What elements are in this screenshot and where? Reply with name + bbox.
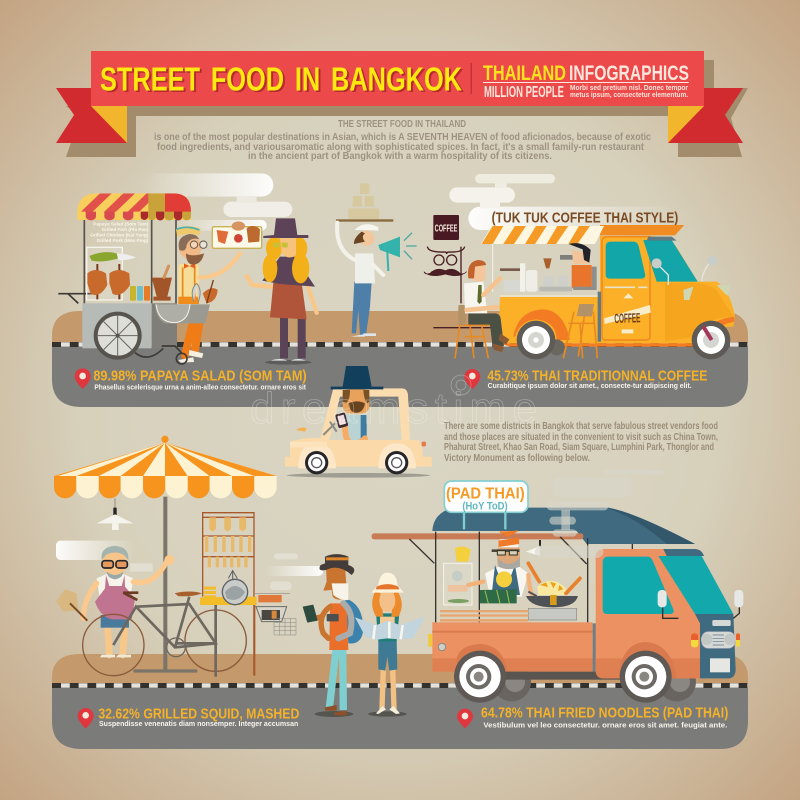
- driver hat: [331, 366, 383, 389]
- cart body: [82, 303, 152, 348]
- right ribbon tail: [668, 88, 743, 143]
- cook shirt and apron: [485, 566, 528, 597]
- tuk tuk trim: [500, 293, 600, 299]
- customer torso: [464, 282, 487, 313]
- truck body: [428, 549, 743, 701]
- waitress head: [359, 231, 374, 246]
- car body: [285, 427, 432, 468]
- side mirrors: [657, 261, 712, 285]
- caption: thai coffee: [464, 369, 707, 390]
- scene: car with driver: [285, 366, 432, 478]
- intro text block: in the ancient part of Bangkok with a warm hospitality of its citizens.: [248, 151, 552, 162]
- banner small text: metus ipsum, consectetur elementum.: [570, 92, 688, 99]
- tuk tuk roof: [600, 225, 684, 235]
- shop umbrella: [54, 436, 277, 673]
- rear wheels: [492, 663, 531, 701]
- truck lights: [691, 633, 698, 647]
- cook herbs: [496, 571, 512, 587]
- million people: MILLION PEOPLE: [484, 84, 564, 101]
- vendor fan: [56, 589, 78, 612]
- hanging scale: [222, 579, 248, 605]
- road panel: top: [52, 311, 748, 407]
- waitress with megaphone: [336, 183, 400, 337]
- cart menu: Grilled Pork (Moo Ping): [97, 238, 149, 243]
- cart awning: [77, 193, 191, 220]
- caption: papaya salad: [75, 368, 307, 391]
- caption: papaya salad: Phasellus scelerisque urna a anim-alleo consectetur. ornare eros sit: [94, 382, 306, 391]
- car shadow: [287, 473, 430, 478]
- cook arm: [199, 253, 240, 277]
- umbrella scallops: [54, 476, 254, 498]
- tourist arm and phone: [315, 607, 330, 638]
- driver arm and phone: [345, 427, 365, 443]
- vendor apron: [95, 575, 135, 619]
- customer legs: [468, 319, 498, 347]
- intro text block: THE STREET FOOD IN THAILAND: [338, 119, 466, 130]
- barista: [560, 243, 597, 290]
- megaphone sound lines: [404, 233, 417, 259]
- caption: grilled squid: Suspendisse venenatis diam nonsemper. Integer accumsan: [99, 719, 299, 728]
- chairs: [455, 305, 490, 358]
- umbrella pole: [163, 497, 167, 671]
- bicycle wheels: [83, 614, 144, 676]
- female shorts: [378, 641, 397, 671]
- front wheel: [135, 346, 187, 364]
- banner small text: [570, 85, 688, 99]
- waitress top: [355, 253, 375, 283]
- drying squid rack: [203, 513, 254, 675]
- coffee signboard: COFFEE: [435, 223, 458, 234]
- steam pot: [528, 608, 577, 620]
- districts text block: Victory Monument as following below.: [444, 453, 590, 464]
- districts text block: and those places are situated in the convenient to visit such as China Town,: [444, 432, 718, 443]
- male tourist: [303, 554, 363, 717]
- scene: tuk tuk coffee: [404, 174, 735, 390]
- awning: [481, 226, 604, 292]
- wok with fried noodles: [526, 563, 580, 607]
- vendor shirt: [97, 574, 133, 600]
- title ribbon: [56, 51, 748, 157]
- caption: fried noodles: Vestibulum vel leo consectetur. ornare eros sit amet. feugiat ante.: [483, 720, 727, 729]
- bicycle saddle: [175, 592, 202, 596]
- umbrella canopy: [54, 443, 277, 476]
- woman face: [280, 238, 296, 257]
- tourist backpack: [345, 598, 363, 643]
- smoke: [449, 174, 675, 230]
- caption: fried noodles: [457, 705, 729, 729]
- caption: thai coffee: Curabitique ipsum dolor sit amet., consecte-tur adipiscing elit.: [488, 381, 692, 390]
- tourist hat: [319, 554, 354, 575]
- female shadow: [368, 711, 407, 717]
- vendor head: [102, 546, 127, 577]
- tourist camera: [327, 614, 339, 621]
- scene: papaya salad cart and people: [58, 173, 400, 391]
- truck wheels: [454, 651, 672, 703]
- cart poles: [84, 220, 176, 303]
- districts text block: There are some districts in Bangkok that serve fabulous street vendors food: [444, 421, 718, 432]
- tuk tuk title: (TUK TUK COFFEE THAI STYLE): [492, 210, 678, 226]
- cart menu: Papaya Salad (Som Tam): [93, 221, 149, 226]
- tourist shadow: [315, 711, 353, 717]
- food tray: [212, 221, 262, 248]
- woman hair: [263, 237, 309, 283]
- cart menu: Grilled Chicken (Kai Yang): [90, 232, 149, 237]
- intro text block: food ingredients, and variousaromatic along with sophisticated spices. In fact, it's a small family-run restaurant: [157, 142, 645, 153]
- mortar and pestle: [152, 266, 172, 301]
- female tourist: [355, 573, 425, 717]
- ribbon folds: [91, 106, 704, 143]
- seated customer: [455, 260, 597, 358]
- car wheels: [305, 451, 408, 474]
- pad thai sign: [444, 481, 528, 529]
- squid stall table: [200, 570, 257, 676]
- female hair: [372, 590, 402, 617]
- thailand heading: THAILAND: [483, 62, 566, 85]
- woman arms: [247, 276, 317, 313]
- title ribbon: STREET FOOD IN BANGKOK: [100, 62, 462, 98]
- cook head: [179, 236, 201, 259]
- tuk tuk door: [602, 237, 650, 340]
- pad thai sign: (PAD THAI): [446, 485, 525, 502]
- pad thai sign: (HoY ToD): [462, 501, 508, 513]
- city map: [355, 617, 425, 640]
- vendor legs: [107, 623, 125, 655]
- cart menu: Grilled Fish (Pla Pao): [101, 227, 149, 232]
- cook: [176, 226, 240, 363]
- female legs: [382, 668, 394, 708]
- caption: papaya salad: 89.98% PAPAYA SALAD (SOM TAM): [93, 369, 307, 385]
- cook legs: [185, 320, 200, 355]
- caption: grilled squid: 32.62% GRILLED SQUID, MASHED: [98, 707, 299, 723]
- food cart: [58, 190, 240, 364]
- tourist shirt: [329, 603, 348, 650]
- scene: grilled squid stall: [54, 436, 425, 729]
- truck mirrors: [663, 605, 739, 618]
- districts text block: Phahurat Street, Khao San Road, Siam Square, Lumphini Park, Thonglor and: [444, 442, 714, 453]
- cart wheel: [96, 314, 140, 358]
- truck windshield: [658, 556, 733, 614]
- female top: [376, 613, 399, 641]
- caption: grilled squid: [78, 707, 299, 729]
- car cabin frame: [320, 388, 410, 440]
- tourist head: [323, 566, 347, 600]
- left ribbon tail: [56, 88, 127, 143]
- woman legs: [284, 317, 302, 358]
- cook: [468, 531, 535, 603]
- intro text block: is one of the most popular destinations in Asian, which is A SEVENTH HEAVEN of food aficionados, because of exotic: [154, 132, 651, 143]
- road panel: bottom: [52, 654, 748, 749]
- door coffee badge: [604, 305, 651, 324]
- intro text block: [154, 119, 651, 162]
- cart menu: [90, 221, 149, 243]
- sauce bottles: [130, 286, 150, 301]
- truck side window: [603, 557, 674, 614]
- ribbon band: [91, 51, 704, 106]
- driver: [331, 366, 383, 445]
- truck canopy: [432, 508, 695, 544]
- woman with hat: [247, 218, 317, 365]
- tuk tuk wheels: [517, 321, 730, 359]
- hanging lamp: [526, 540, 540, 556]
- customer head: [472, 263, 486, 282]
- truck bed: [432, 622, 593, 672]
- coffee signboard: [424, 215, 497, 328]
- umbrella finial: [161, 436, 169, 443]
- truck cab: [596, 549, 702, 678]
- charcoal grill: [255, 593, 296, 635]
- scene: pad thai truck: [372, 470, 743, 729]
- wooden shelf: [440, 610, 528, 622]
- vendor arms: [83, 562, 167, 618]
- bicycle: [83, 592, 246, 677]
- cart handle: [58, 294, 97, 303]
- main title: STREET FOOD IN BANGKOK: [102, 63, 464, 100]
- hanging lamp: [97, 498, 133, 530]
- bicycle handlebar: [123, 593, 138, 600]
- truck grille: [702, 632, 735, 648]
- steering wheel: [323, 422, 337, 435]
- infographics heading: INFOGRAPHICS: [569, 62, 689, 85]
- stall poles: [409, 532, 632, 622]
- old vendor: [56, 546, 174, 657]
- smoke: [143, 173, 292, 231]
- cook head: [497, 545, 520, 568]
- driver torso: [345, 415, 367, 445]
- woman dress: [270, 283, 307, 319]
- waitress jeans: [352, 282, 372, 335]
- caption: thai coffee: 45.73% THAI TRADITIONNAL COFFEE: [487, 369, 707, 385]
- basin and tools: [155, 280, 218, 323]
- display case: [444, 547, 472, 605]
- bicycle frame: [113, 597, 216, 677]
- tuk tuk body: [499, 236, 735, 347]
- serving tray: [336, 219, 393, 222]
- glass case with grilled chicken: [87, 247, 136, 300]
- woman cape: [262, 257, 315, 287]
- woman hat: [263, 218, 308, 238]
- stacked boxes: [348, 183, 379, 219]
- truck nose: [695, 614, 736, 678]
- tuk tuk windshield: [643, 240, 698, 282]
- tuk tuk side window: [606, 242, 645, 279]
- banner small text: Morbi sed pretium nisl. Donec tempor: [570, 85, 688, 92]
- cook body: [178, 264, 199, 304]
- smoke: [56, 541, 323, 590]
- vendor shorts: [101, 615, 129, 628]
- megaphone: [378, 237, 400, 257]
- steam: [535, 470, 663, 558]
- tuk tuk body: COFFEE: [614, 310, 641, 326]
- coffee equipment: [500, 258, 572, 292]
- female hat: [371, 573, 404, 593]
- caption: fried noodles: 64.78% THAI FRIED NOODLES (PAD THAI): [481, 705, 729, 721]
- woman shadow: [265, 360, 312, 365]
- ribbon shadow: [66, 60, 748, 157]
- watermark: dreamstime: [250, 384, 537, 433]
- districts text block: [444, 421, 718, 464]
- stall beam: [372, 533, 583, 539]
- tourist legs: [329, 650, 343, 710]
- driver head: [343, 388, 369, 413]
